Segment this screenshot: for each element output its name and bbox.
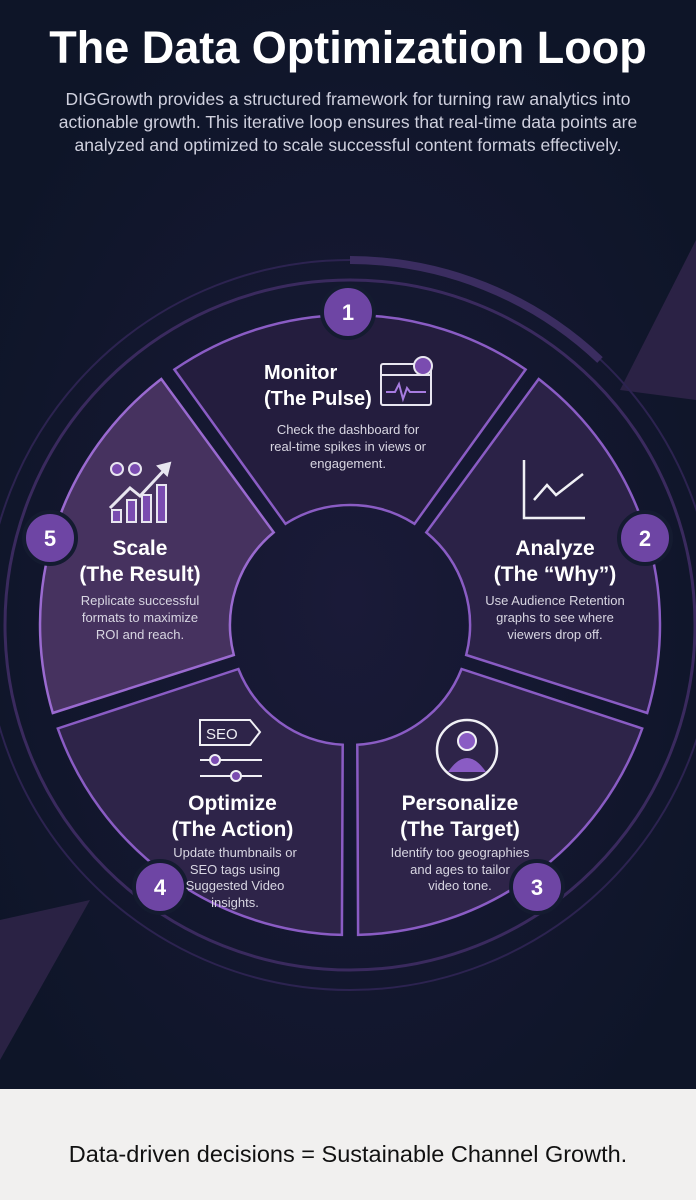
- segment: personalize: [357, 669, 642, 935]
- body: optimize: insights.: [211, 894, 259, 910]
- body: scale: ROI and reach.: [96, 627, 184, 642]
- body: personalize: Identify too geographies: [391, 845, 529, 860]
- text: personalize: [400, 792, 520, 841]
- body: optimize: Update thumbnails or: [173, 845, 297, 860]
- body: monitor: Check the dashboard for: [277, 422, 419, 437]
- number badges: 1: [342, 300, 354, 325]
- icon: SEO tag with sliders: [200, 720, 262, 781]
- text: monitor: (The Pulse): [264, 388, 372, 410]
- text: analyze: Analyze: [515, 537, 595, 560]
- subtitle: actionable growth. This iterative loop ensures that real-time data points are: [59, 112, 637, 132]
- segment: monitor: [174, 315, 526, 524]
- number badges: 4: [154, 875, 167, 900]
- body: analyze: viewers drop off.: [507, 627, 603, 642]
- body: scale: formats to maximize: [82, 610, 198, 625]
- text: analyze: [494, 537, 616, 586]
- body: monitor: real-time spikes in views or: [270, 439, 426, 454]
- number badges: 3: [531, 875, 543, 900]
- number badges: [24, 286, 671, 913]
- number badges: 2: [639, 526, 651, 551]
- segment: optimize: [58, 669, 343, 935]
- body: scale: [81, 593, 199, 642]
- body: optimize: SEO tags using: [190, 862, 280, 876]
- icon: monitor dashboard: [381, 357, 432, 405]
- body: personalize: and ages to tailor: [410, 862, 510, 876]
- icon: person: [437, 720, 497, 780]
- text: optimize: (The Action): [172, 818, 293, 841]
- body: optimize: Suggested Video: [186, 878, 284, 893]
- body: analyze: graphs to see where: [496, 610, 614, 625]
- segment: scale: [40, 379, 274, 713]
- text: scale: (The Result): [79, 563, 201, 586]
- segment: analyze: [426, 379, 660, 713]
- text: scale: [79, 537, 201, 586]
- subtitle: [59, 89, 637, 155]
- body: monitor: engagement.: [310, 456, 386, 471]
- body: analyze: Use Audience Retention: [485, 593, 625, 608]
- body: scale: Replicate successful: [81, 593, 199, 608]
- icon: SEO tag with sliders: SEO: [206, 726, 238, 743]
- text: personalize: (The Target): [400, 818, 520, 841]
- body: optimize: [173, 845, 297, 910]
- text: personalize: Personalize: [402, 792, 518, 815]
- subtitle: DIGGrowth provides a structured framework for turning raw analytics into: [65, 89, 631, 109]
- text: monitor: Monitor: [264, 362, 337, 384]
- icon: growth bars: [110, 463, 170, 522]
- text: monitor: [264, 362, 372, 410]
- text: scale: Scale: [113, 537, 167, 560]
- subtitle: analyzed and optimized to scale successful content formats effectively.: [74, 135, 622, 155]
- text: optimize: Optimize: [188, 792, 277, 815]
- number badges: 5: [44, 526, 56, 551]
- body: personalize: [391, 845, 529, 893]
- footer: [0, 1089, 696, 1200]
- title: The Data Optimization Loop: [49, 22, 647, 73]
- body: personalize: video tone.: [428, 878, 492, 893]
- icon: line chart: [524, 460, 585, 518]
- text: optimize: [172, 792, 293, 841]
- footer text: Data-driven decisions = Sustainable Channel Growth.: [69, 1141, 627, 1167]
- text: analyze: (The “Why”): [494, 563, 616, 586]
- body: analyze: [485, 593, 625, 642]
- body: monitor: [270, 422, 426, 471]
